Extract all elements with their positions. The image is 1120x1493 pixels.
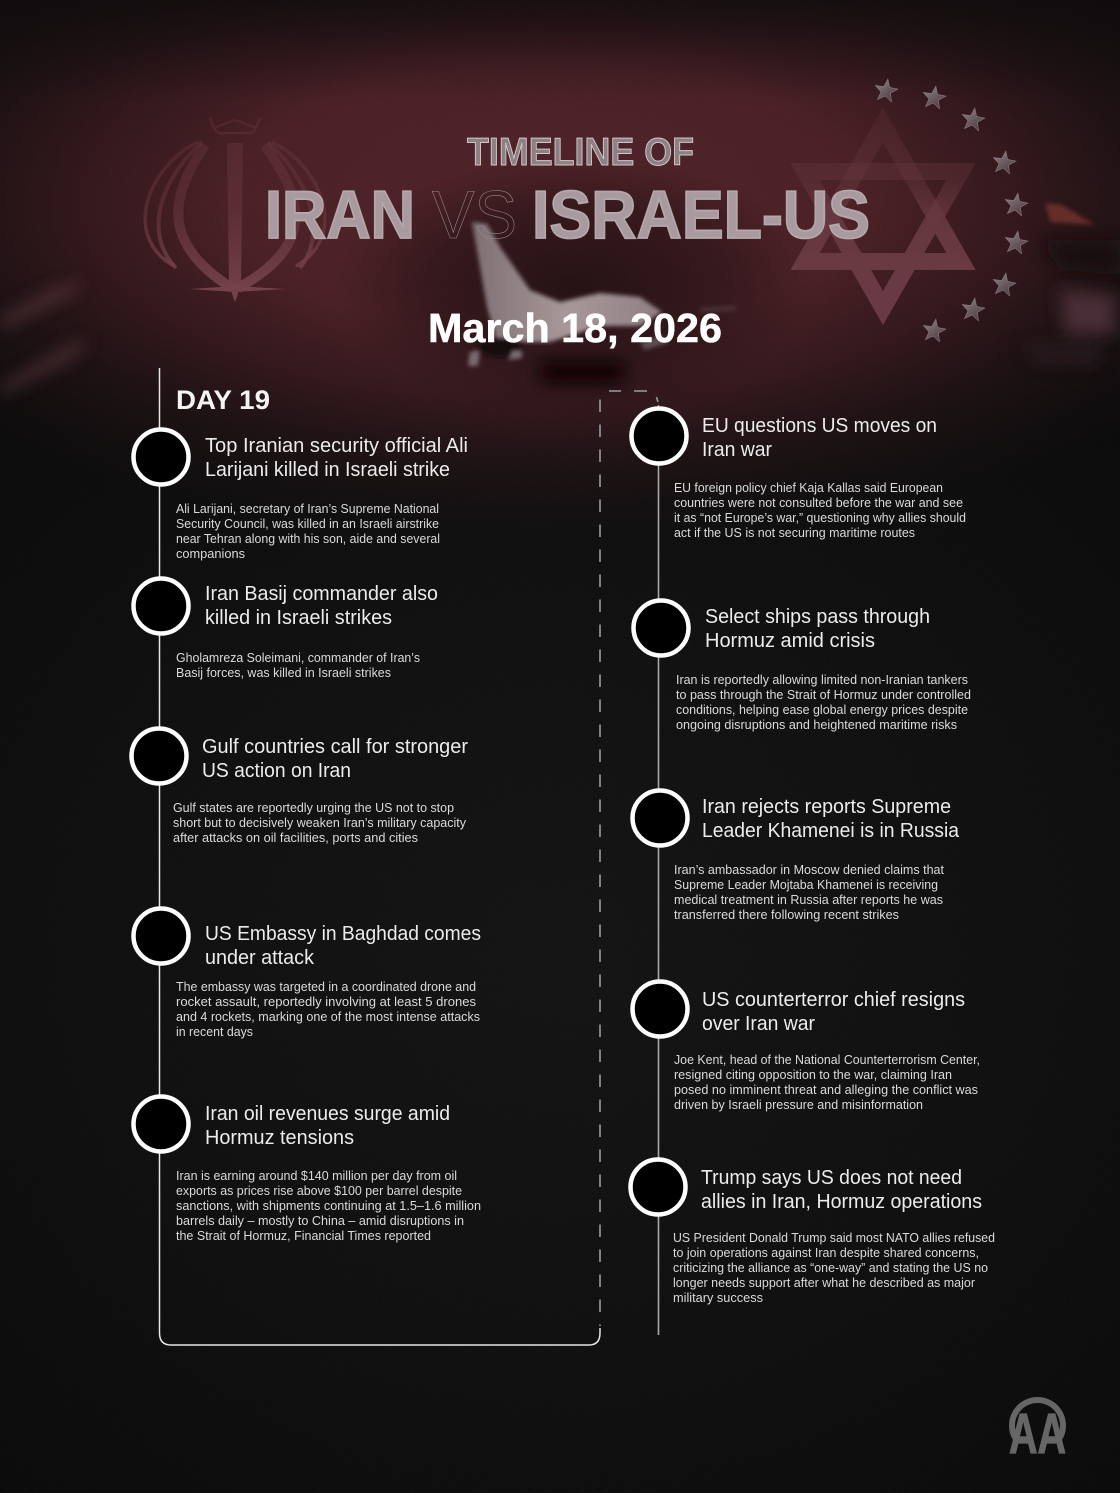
timeline connector: left solid xyxy=(160,368,600,1345)
event: EU questions: EU foreign policy chief Kaja Kallas said European xyxy=(674,481,943,495)
event: Larijani killed: Larijani killed in Israeli strike xyxy=(205,459,450,481)
icon: Star of David xyxy=(805,125,961,308)
event: Khamenei reports: Supreme Leader Mojtaba Khamenei is receiving xyxy=(674,878,938,892)
title: Iran vs Israel-US: VS xyxy=(432,177,517,253)
event: US Embassy: The embassy was targeted in a coordinated drone and xyxy=(176,980,476,994)
event: Trump allies: criticizing the alliance as “one-way” and stating the US no xyxy=(673,1261,988,1275)
event: US Embassy: US Embassy in Baghdad comes xyxy=(205,923,481,945)
event: Select ships: Select ships pass through xyxy=(705,606,930,628)
event: Khamenei reports: medical treatment in Russia after reports he was xyxy=(674,893,943,907)
title: Iran vs Israel-US xyxy=(265,177,870,253)
event: Larijani killed xyxy=(134,430,468,561)
event: Select ships xyxy=(634,600,971,732)
event: Counterterror chief: Joe Kent, head of the National Counterterrorism Center, xyxy=(674,1053,980,1067)
event: Khamenei reports: Iran rejects reports Supreme xyxy=(702,796,951,818)
event: US Embassy xyxy=(134,908,481,1039)
event: Trump allies: military success xyxy=(673,1291,763,1305)
date: March 18, 2026 xyxy=(428,305,722,351)
event: US Embassy: rocket assault, reportedly involving at least 5 drones xyxy=(176,995,476,1009)
event: Select ships: conditions, helping ease global energy prices despite xyxy=(676,703,968,717)
event: Oil revenues: exports as prices rise above $100 per barrel despite xyxy=(176,1184,462,1198)
event: Gulf countries: Gulf states are reportedly urging the US not to stop xyxy=(173,801,454,815)
event: Oil revenues: sanctions, with shipments continuing at 1.5–1.6 million xyxy=(176,1199,481,1213)
icon: fighter jet xyxy=(468,222,737,382)
event: US Embassy: under attack xyxy=(205,947,315,969)
title: Iran vs Israel-US: ISRAEL-US xyxy=(532,177,870,253)
event: Select ships: ongoing disruptions and heightened maritime risks xyxy=(676,718,957,732)
event: Oil revenues: the Strait of Hormuz, Financial Times reported xyxy=(176,1229,431,1243)
blurred streaks right xyxy=(1020,203,1120,365)
icon: Iran emblem xyxy=(145,118,325,302)
title: Iran vs Israel-US: IRAN xyxy=(265,177,415,253)
event: Trump allies xyxy=(630,1160,995,1305)
blurred streaks left xyxy=(0,280,90,395)
event: Oil revenues: Iran is earning around $140 million per day from oil xyxy=(176,1169,457,1183)
event: Larijani killed: Ali Larijani, secretary of Iran’s Supreme National xyxy=(176,502,439,516)
event: EU questions: EU questions US moves on xyxy=(702,415,937,437)
event: Basij commander xyxy=(134,578,438,680)
event: Khamenei reports: Iran’s ambassador in Moscow denied claims that xyxy=(674,863,945,877)
timeline connector: right solid xyxy=(658,405,660,1335)
event: EU questions: it as “not Europe’s war,” questioning why allies should xyxy=(674,511,966,525)
event: Counterterror chief xyxy=(632,982,980,1112)
event: Basij commander: Iran Basij commander also xyxy=(205,583,438,605)
event: Select ships: Hormuz amid crisis xyxy=(705,630,875,652)
event: Select ships: to pass through the Strait of Hormuz under controlled xyxy=(676,688,971,702)
event: Select ships: Iran is reportedly allowing limited non-Iranian tankers xyxy=(676,673,968,687)
event: Basij commander: killed in Israeli strikes xyxy=(205,607,392,629)
logo: Anadolu Agency xyxy=(1009,1400,1066,1466)
event: Larijani killed: companions xyxy=(176,547,245,561)
event: EU questions: Iran war xyxy=(702,439,772,461)
event: Trump allies: US President Donald Trump said most NATO allies refused xyxy=(673,1231,995,1245)
event: Counterterror chief: over Iran war xyxy=(702,1013,815,1035)
heading: Day 19: DAY 19 xyxy=(176,385,270,415)
event: Gulf countries: short but to decisively weaken Iran’s military capacity xyxy=(173,816,467,830)
event: Larijani killed: Top Iranian security official Ali xyxy=(205,435,468,457)
event: US Embassy: and 4 rockets, marking one of the most intense attacks xyxy=(176,1010,480,1024)
event: Khamenei reports: Leader Khamenei is in Russia xyxy=(702,820,960,842)
timeline connector: dashed xyxy=(600,391,658,1326)
title: Timeline of: TIMELINE OF xyxy=(467,131,694,174)
event: EU questions: countries were not consulted before the war and see xyxy=(674,496,963,510)
event: Oil revenues xyxy=(134,1096,481,1243)
event: Oil revenues: Hormuz tensions xyxy=(205,1127,354,1149)
event: Counterterror chief: driven by Israeli pressure and misinformation xyxy=(674,1098,923,1112)
event: Counterterror chief: posed no imminent threat and alleging the conflict was xyxy=(674,1083,978,1097)
event: Gulf countries xyxy=(132,728,468,845)
event: Gulf countries: Gulf countries call for stronger xyxy=(202,736,468,758)
icon: ring of stars xyxy=(873,77,1029,342)
event: Trump allies: Trump says US does not need xyxy=(701,1167,962,1189)
event: Basij commander: Gholamreza Soleimani, commander of Iran’s xyxy=(176,651,420,665)
event: Trump allies: allies in Iran, Hormuz operations xyxy=(701,1191,982,1213)
event: Oil revenues: barrels daily – mostly to China – amid disruptions in xyxy=(176,1214,464,1228)
event: Larijani killed: near Tehran along with his son, aide and several xyxy=(176,532,440,546)
event: Oil revenues: Iran oil revenues surge amid xyxy=(205,1103,450,1125)
event: Counterterror chief: resigned citing opposition to the war, claiming Iran xyxy=(674,1068,952,1082)
event: Counterterror chief: US counterterror chief resigns xyxy=(702,989,965,1011)
event: US Embassy: in recent days xyxy=(176,1025,253,1039)
logo: Anadolu Agency: AA xyxy=(1009,1402,1066,1466)
event: Khamenei reports xyxy=(632,790,960,922)
event: EU questions: act if the US is not securing maritime routes xyxy=(674,526,915,540)
event: Gulf countries: after attacks on oil facilities, ports and cities xyxy=(173,831,418,845)
event: Trump allies: to join operations against Iran despite shared concerns, xyxy=(673,1246,979,1260)
event: Gulf countries: US action on Iran xyxy=(202,760,351,782)
event: Basij commander: Basij forces, was killed in Israeli strikes xyxy=(176,666,391,680)
event: Khamenei reports: transferred there following recent strikes xyxy=(674,908,899,922)
event: EU questions xyxy=(632,408,966,540)
event: Larijani killed: Security Council, was killed in an Israeli airstrike xyxy=(176,517,439,531)
event: Trump allies: longer needs support after what he described as major xyxy=(673,1276,975,1290)
